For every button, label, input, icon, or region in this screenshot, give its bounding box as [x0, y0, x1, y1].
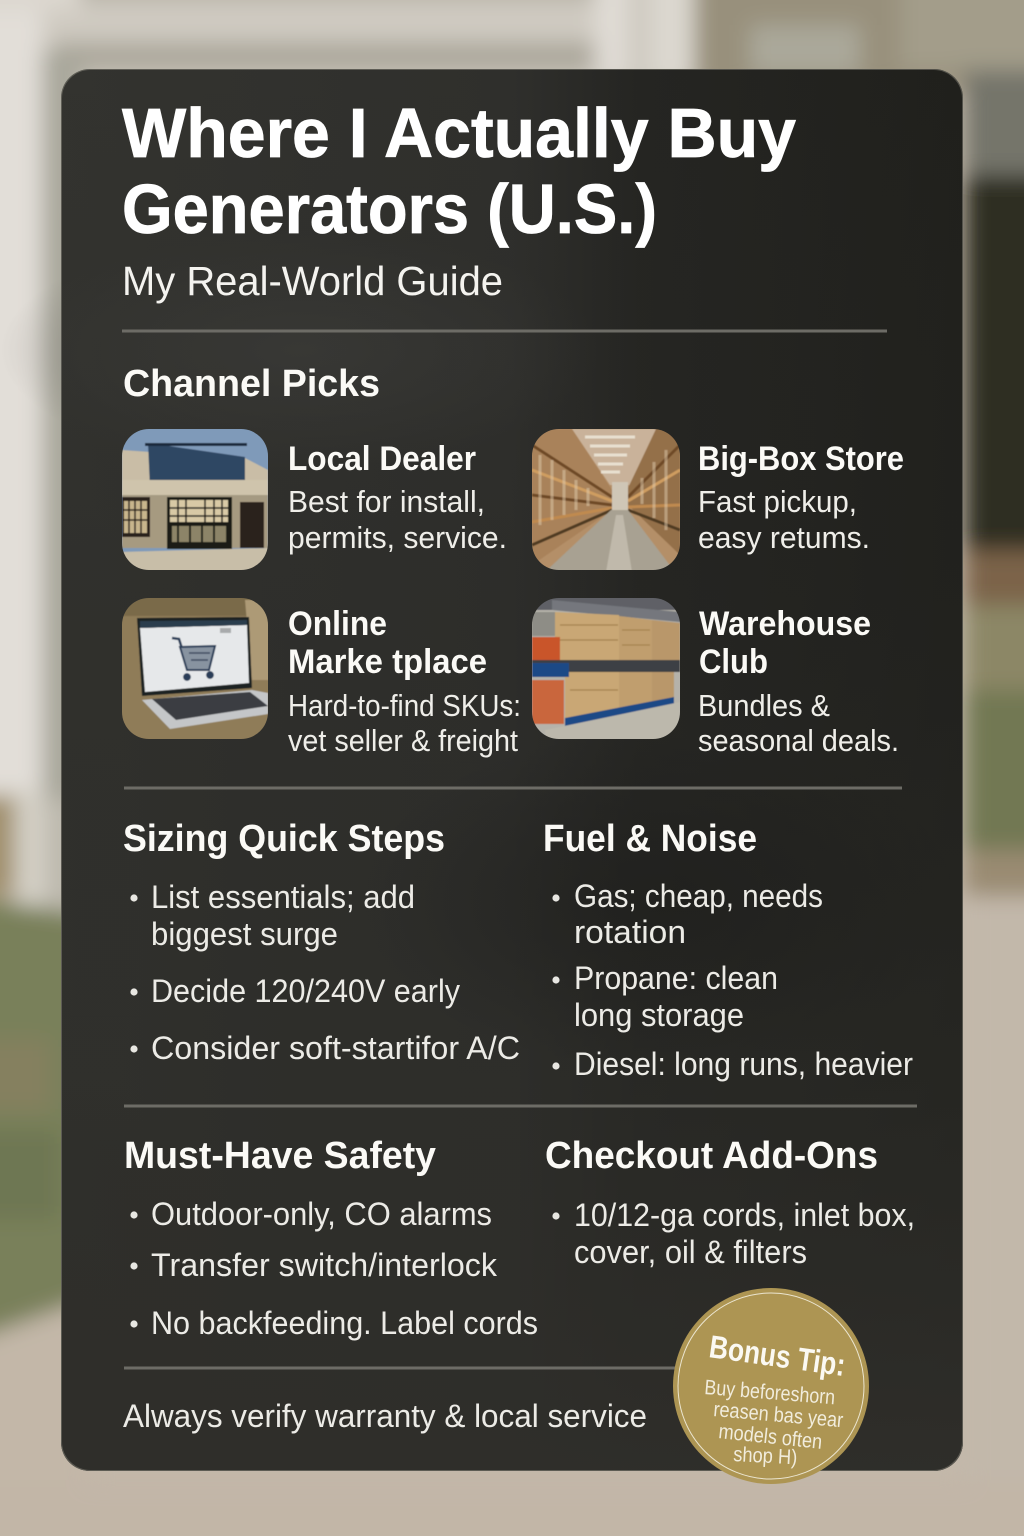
badge text: Buy beforeshorn [704, 1376, 836, 1409]
channel: online marketplace [120, 596, 521, 758]
list: add-ons: 10/12-ga cords, inlet box, [574, 1197, 915, 1233]
list: safety items: No backfeeding. Label cords [151, 1305, 538, 1341]
name: big-box store: Big-Box Store [698, 440, 904, 478]
section: fuel and noise [543, 818, 913, 1082]
list: sizing steps: List essentials; add [151, 879, 415, 915]
list: safety items: Transfer switch/interlock [151, 1247, 498, 1283]
heading: channel picks: Channel Picks [123, 363, 380, 405]
heading: fuel and noise: Fuel & Noise [543, 818, 757, 860]
heading: checkout add-ons: Checkout Add-Ons [545, 1135, 878, 1177]
subtitle: My Real-World Guide [122, 258, 503, 304]
badge text: models often [717, 1420, 823, 1454]
photo: store aisle [530, 427, 682, 572]
heading: must-have safety: Must-Have Safety [124, 1135, 436, 1177]
title: Generators (U.S.) [122, 170, 657, 248]
description: local dealer: Best for install, [288, 484, 485, 519]
list: sizing steps [130, 879, 520, 1066]
section: sizing quick steps [123, 818, 520, 1066]
list: fuel types [552, 878, 913, 1082]
list: sizing steps: Decide 120/240V early [151, 973, 460, 1009]
description: big-box store: Fast pickup, [698, 484, 857, 519]
description: warehouse club: seasonal deals. [698, 723, 899, 758]
photo: storefront [120, 427, 270, 572]
channel: big-box store [530, 427, 904, 572]
description: local dealer: permits, service. [288, 520, 507, 555]
description: warehouse club: Bundles & [698, 688, 830, 723]
name: online marketplace [288, 605, 487, 681]
icon: shopping cart [172, 638, 215, 680]
list: safety items [130, 1196, 538, 1341]
description: big-box store: easy retums. [698, 520, 870, 555]
list: fuel types: rotation [574, 914, 686, 950]
description: warehouse club [698, 688, 899, 758]
list: sizing steps: Consider soft-startifor A/C [151, 1030, 520, 1066]
list: fuel types: Propane: clean [574, 960, 778, 996]
badge text [704, 1376, 844, 1469]
name: online marketplace: Marke tplace [288, 643, 487, 681]
list: fuel types: Gas; cheap, needs [574, 878, 823, 914]
description: online marketplace: vet seller & freight [288, 723, 518, 758]
section: must-have safety [124, 1135, 538, 1341]
description: online marketplace: Hard-to-find SKUs: [288, 688, 521, 723]
name: warehouse club: Club [699, 643, 768, 681]
list: fuel types: Diesel: long runs, heavier [574, 1046, 913, 1082]
description: big-box store [698, 484, 870, 555]
description: local dealer [288, 484, 507, 555]
photo: pallets of boxes [530, 596, 682, 741]
name: warehouse club: Warehouse [699, 605, 871, 643]
badge heading: Bonus Tip: [707, 1328, 848, 1383]
heading: sizing quick steps: Sizing Quick Steps [123, 818, 445, 860]
title [122, 94, 796, 248]
footer note: Always verify warranty & local service [123, 1398, 647, 1434]
list: sizing steps: biggest surge [151, 916, 338, 952]
name: local dealer: Local Dealer [288, 440, 476, 478]
name: warehouse club [699, 605, 871, 681]
badge text: reasen bas year [713, 1398, 844, 1432]
photo: laptop with cart [120, 596, 270, 741]
list: add-ons [552, 1197, 915, 1270]
badge text: shop H) [733, 1443, 798, 1469]
list: fuel types: long storage [574, 997, 744, 1033]
list: safety items: Outdoor-only, CO alarms [151, 1196, 492, 1232]
title: Where I Actually Buy [122, 94, 796, 172]
badge: bonus tip [673, 1288, 869, 1484]
section: checkout add-ons [545, 1135, 915, 1270]
channel: local dealer [120, 427, 507, 572]
list: add-ons: cover, oil & filters [574, 1234, 807, 1270]
description: online marketplace [288, 688, 521, 758]
channel: warehouse club [530, 596, 899, 758]
name: online marketplace: Online [288, 605, 387, 643]
